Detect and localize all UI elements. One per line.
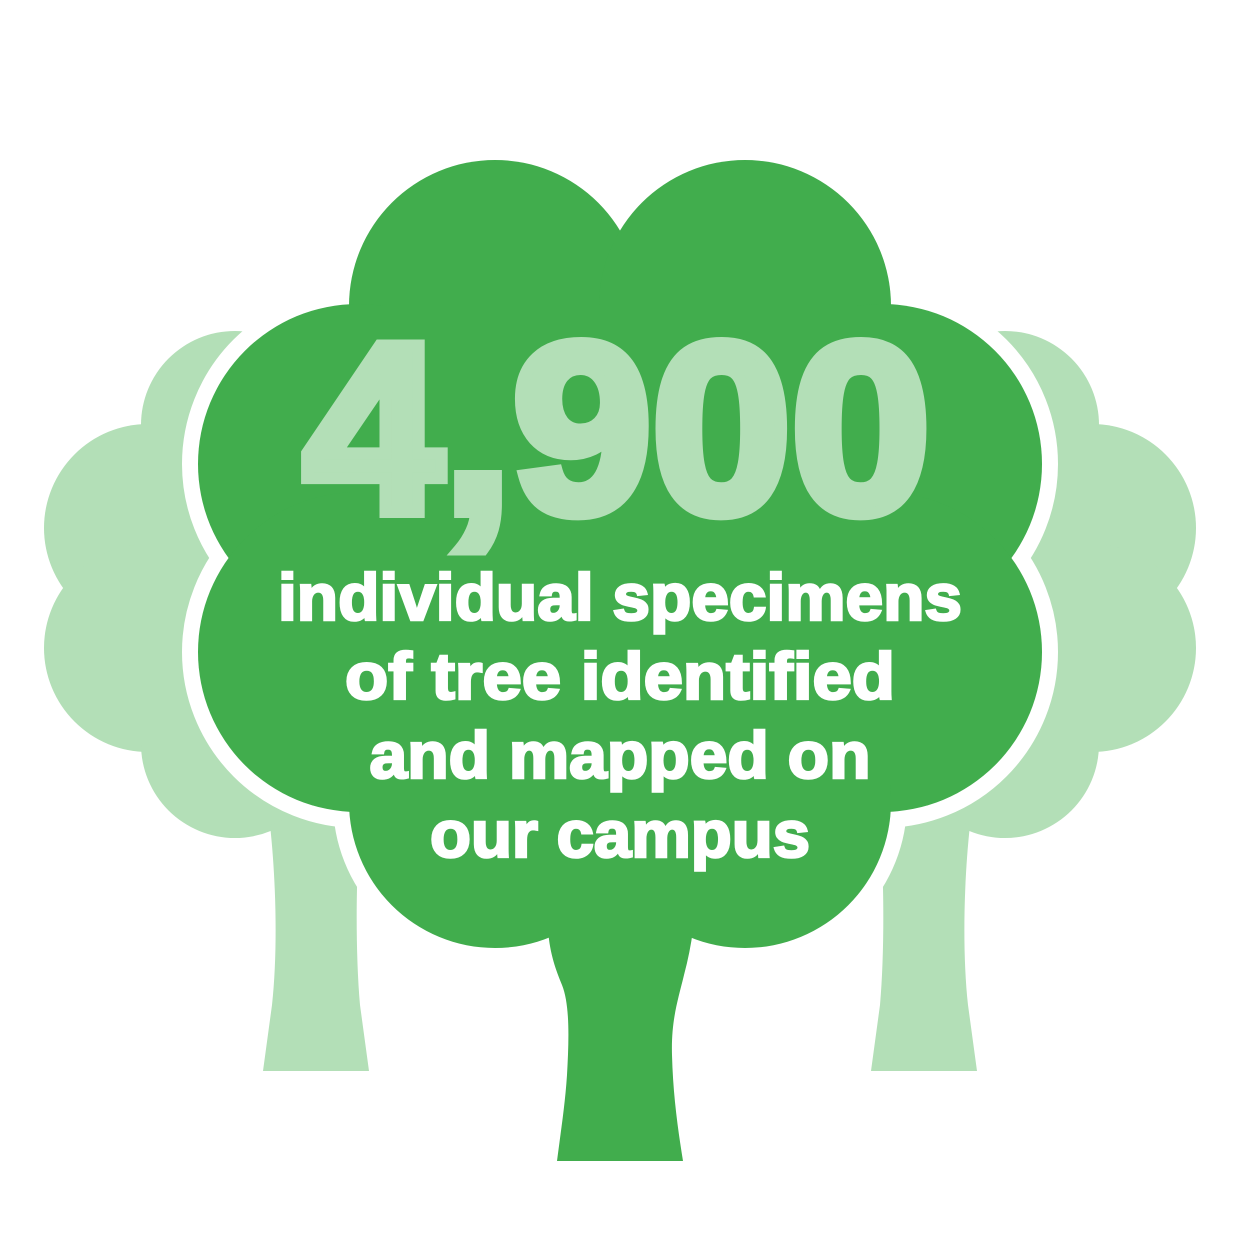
- icon: central tree white outline: [198, 160, 1042, 948]
- description text: [278, 560, 962, 871]
- big number: 4,900: [304, 294, 930, 564]
- icon: right pale tree: [871, 331, 1196, 1071]
- icon: central dark tree: [198, 160, 1042, 1161]
- icon: left pale tree: [44, 331, 369, 1071]
- line 4: our campus: [430, 797, 810, 871]
- line 3: and mapped on: [370, 718, 870, 792]
- line 1: individual specimens: [278, 560, 962, 634]
- line 2: of tree identified: [345, 639, 895, 713]
